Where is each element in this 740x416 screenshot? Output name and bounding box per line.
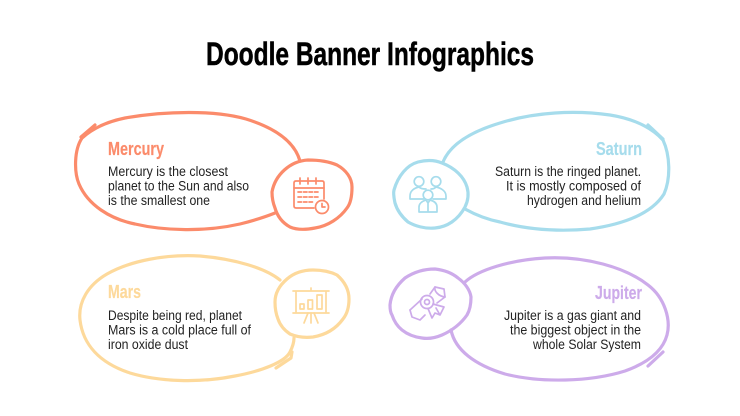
icon: diploma scroll	[410, 287, 445, 320]
text: Saturn: It is mostly composed of	[506, 178, 641, 194]
heading: Mars: Mars	[108, 281, 141, 302]
icon circle: Mars	[275, 270, 349, 337]
banner outline: Mars	[80, 256, 294, 381]
text: Mars: Mars is a cold place full of	[108, 322, 251, 338]
arrow head: Mercury	[81, 125, 95, 137]
icon: calendar	[294, 178, 328, 214]
icon circle: Saturn	[394, 161, 468, 228]
text: Mercury	[108, 164, 249, 208]
panel: Saturn	[394, 112, 669, 230]
text: Jupiter: Jupiter is a gas giant and	[504, 308, 641, 323]
text: Mars: Despite being red, planet	[108, 308, 242, 323]
text: Mercury: is the smallest one	[108, 193, 210, 208]
banner outline: Jupiter	[451, 258, 668, 380]
banner outline: Saturn	[443, 112, 669, 230]
text: Mars: iron oxide dust	[108, 337, 188, 352]
panel: Mercury	[76, 112, 352, 230]
heading: Mercury: Mercury	[108, 138, 165, 159]
text: Jupiter: the biggest object in the	[510, 322, 641, 338]
text: Mercury: Mercury is the closest	[108, 164, 228, 179]
text: Saturn: Saturn is the ringed planet.	[495, 164, 641, 179]
arrow head: Mars	[276, 352, 292, 368]
text: Saturn: hydrogen and helium	[527, 193, 641, 208]
panel: Mars	[80, 256, 349, 381]
icon: people	[410, 177, 446, 212]
text: Mars	[108, 308, 251, 352]
title: Doodle Banner Infographics	[206, 36, 534, 72]
arrow head: Saturn	[648, 125, 663, 139]
banner outline: Mercury	[76, 112, 300, 230]
text: Jupiter: whole Solar System	[532, 337, 641, 352]
icon circle: Mercury	[272, 160, 352, 229]
text: Jupiter	[504, 308, 641, 352]
text: Saturn	[495, 164, 641, 208]
icon: presentation board	[293, 288, 329, 323]
arrow head: Jupiter	[648, 352, 663, 366]
icon circle: Jupiter	[390, 269, 471, 338]
panel: Jupiter	[390, 258, 668, 380]
text: Mercury: planet to the Sun and also	[108, 178, 249, 194]
heading: Saturn: Saturn	[596, 138, 642, 159]
heading: Jupiter: Jupiter	[595, 282, 642, 303]
